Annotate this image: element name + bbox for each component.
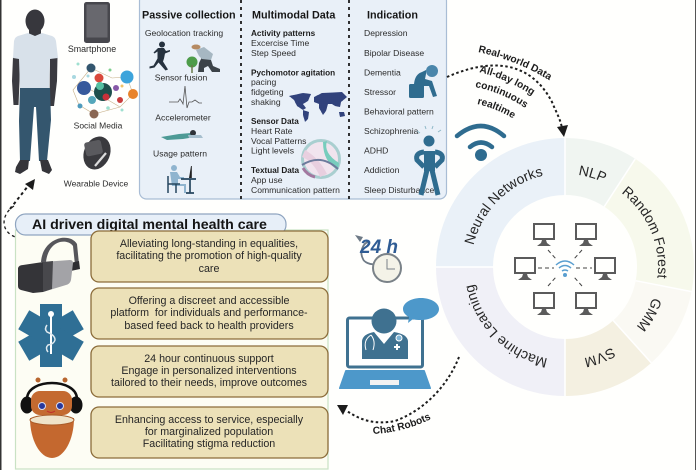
text: geolocation tracking: Geolocation tracking [145,28,223,38]
segment: machine learning: Machine Learning [466,284,547,368]
segment: neural networks [436,138,564,266]
card: discreet platform: based feed back to health providers [124,320,294,332]
list: psychomotor agitation: shaking [251,97,281,107]
icon: chat robot [20,378,82,458]
panel: AI driven digital mental health care [16,214,328,469]
card: discreet platform [91,288,328,339]
icon: depressed seated figure [409,65,438,98]
icon: wearable watch [79,132,115,174]
list: indications: Stressor [364,87,396,97]
card: access to service: for marginalized population [145,426,273,438]
segment: neural networks: Neural Networks [464,169,542,244]
card: equalities: Alleviating long-standing in equalities, [120,238,298,250]
arrow: bracket from care panel [4,206,19,238]
icon: world map [289,92,347,122]
list: indications: Behavioral pattern [364,106,434,116]
text: realtime: realtime [478,98,515,118]
text: real-world data: Real-world Data [478,45,551,80]
heading: passive collection: Passive collection [142,10,236,22]
card: equalities: facilitating the promotion of high-quality [116,250,302,262]
card: continuous support: Engage in personalized interventions [121,365,297,377]
list: indications: ADHD [364,146,388,156]
arrow: chat robots [337,357,459,422]
list: indications: Dementia [364,68,401,78]
segment: NLP: NLP [579,166,606,180]
icon: chord diagram [301,139,341,179]
list: indications: Sleep Disturbance [364,185,434,195]
label: social media: Social Media [74,120,123,130]
list: activity patterns: Step Speed [251,48,296,58]
text: continuous: continuous [476,82,528,108]
icon: ECG trace [169,86,202,108]
list: sensor data: Vocal Patterns [251,136,306,146]
title pill [16,214,286,235]
list: sensor data: Heart Rate [251,126,293,136]
label: wearable device: Wearable Device [64,178,129,188]
card: continuous support: tailored to their needs, improve outcomes [111,377,307,389]
list: textual data: Textual Data [251,166,300,175]
card: equalities [91,231,328,282]
text: all-day long: All-day long [479,66,534,96]
icon: VR headset [18,238,80,293]
list: indications: Depression [364,28,408,38]
segment: GMM: GMM [637,299,660,332]
segment: SVM: SVM [584,348,615,368]
speech bubble [403,298,439,323]
card: access to service [91,407,328,458]
list: indications: Bipolar Disease [364,48,424,58]
panel: data collection [140,0,446,199]
segment: NLP [566,138,634,206]
card: continuous support [91,346,328,397]
list: indications: Addiction [364,165,400,175]
icon: hub wifi [556,261,574,277]
list: textual data: App use [251,175,283,185]
segment: GMM [614,282,691,362]
list: activity patterns: Activity patterns [251,29,316,38]
icon: doctor on laptop [339,298,439,389]
heading: multimodal data: Multimodal Data [252,10,336,22]
segment: machine learning [436,268,564,396]
heading: indication: Indication [367,10,418,22]
icon: gardener with plant [186,44,220,73]
list: sensor data: Light levels [251,146,294,156]
list: psychomotor agitation: pacing [251,77,277,87]
arrow: real-world data into ring [447,65,568,137]
title pill: AI driven digital mental health care [32,217,267,233]
segment: random forest: Random Forest [622,186,667,278]
text: chat robots: Chat Robots [373,414,430,434]
card: access to service: Enhancing access to service, especially [115,414,304,426]
segment: random forest [605,160,694,291]
person figure [12,10,58,174]
icon: social media network [72,62,138,118]
card: discreet platform: platform for individuals and performance- [110,307,308,319]
icon: star of life [18,304,84,367]
ring: AI methods [436,138,694,396]
list: sensor data: Sensor Data [251,117,299,126]
text: accelerometer: Accelerometer [155,112,211,122]
card: access to service: Facilitating stigma reduction [143,438,275,450]
card: equalities: care [199,263,219,275]
column: passive collection [142,10,236,193]
icon: 24 hour clock [355,235,401,282]
icon: wifi signal [457,126,504,161]
segment: SVM [566,321,651,396]
list: indications: Schizophrenia [364,126,419,136]
text: usage pattern: Usage pattern [153,148,207,158]
icon: person at desk [168,165,196,193]
icon: 24 hour clock: 24 h [359,237,398,258]
column: indication [364,10,442,195]
icon: stressed figure [417,126,442,195]
label: smartphone: Smartphone [68,44,116,54]
list: textual data: Communication pattern [251,185,340,195]
card: continuous support: 24 hour continuous support [144,353,274,365]
list: psychomotor agitation: Pychomotor agitation [251,68,335,78]
text: sensor fusion: Sensor fusion [155,72,207,82]
icon: smartphone [84,2,110,43]
list: activity patterns: Excercise Time [251,38,309,48]
network: computers and wifi hub [515,224,615,315]
card: discreet platform: Offering a discreet and accessible [129,295,289,307]
icon: lying person [161,130,203,140]
column: multimodal data [251,10,347,195]
arrow: up to person [10,179,35,209]
icon: runner [150,42,170,70]
list: psychomotor agitation: fidgeting [251,87,284,97]
